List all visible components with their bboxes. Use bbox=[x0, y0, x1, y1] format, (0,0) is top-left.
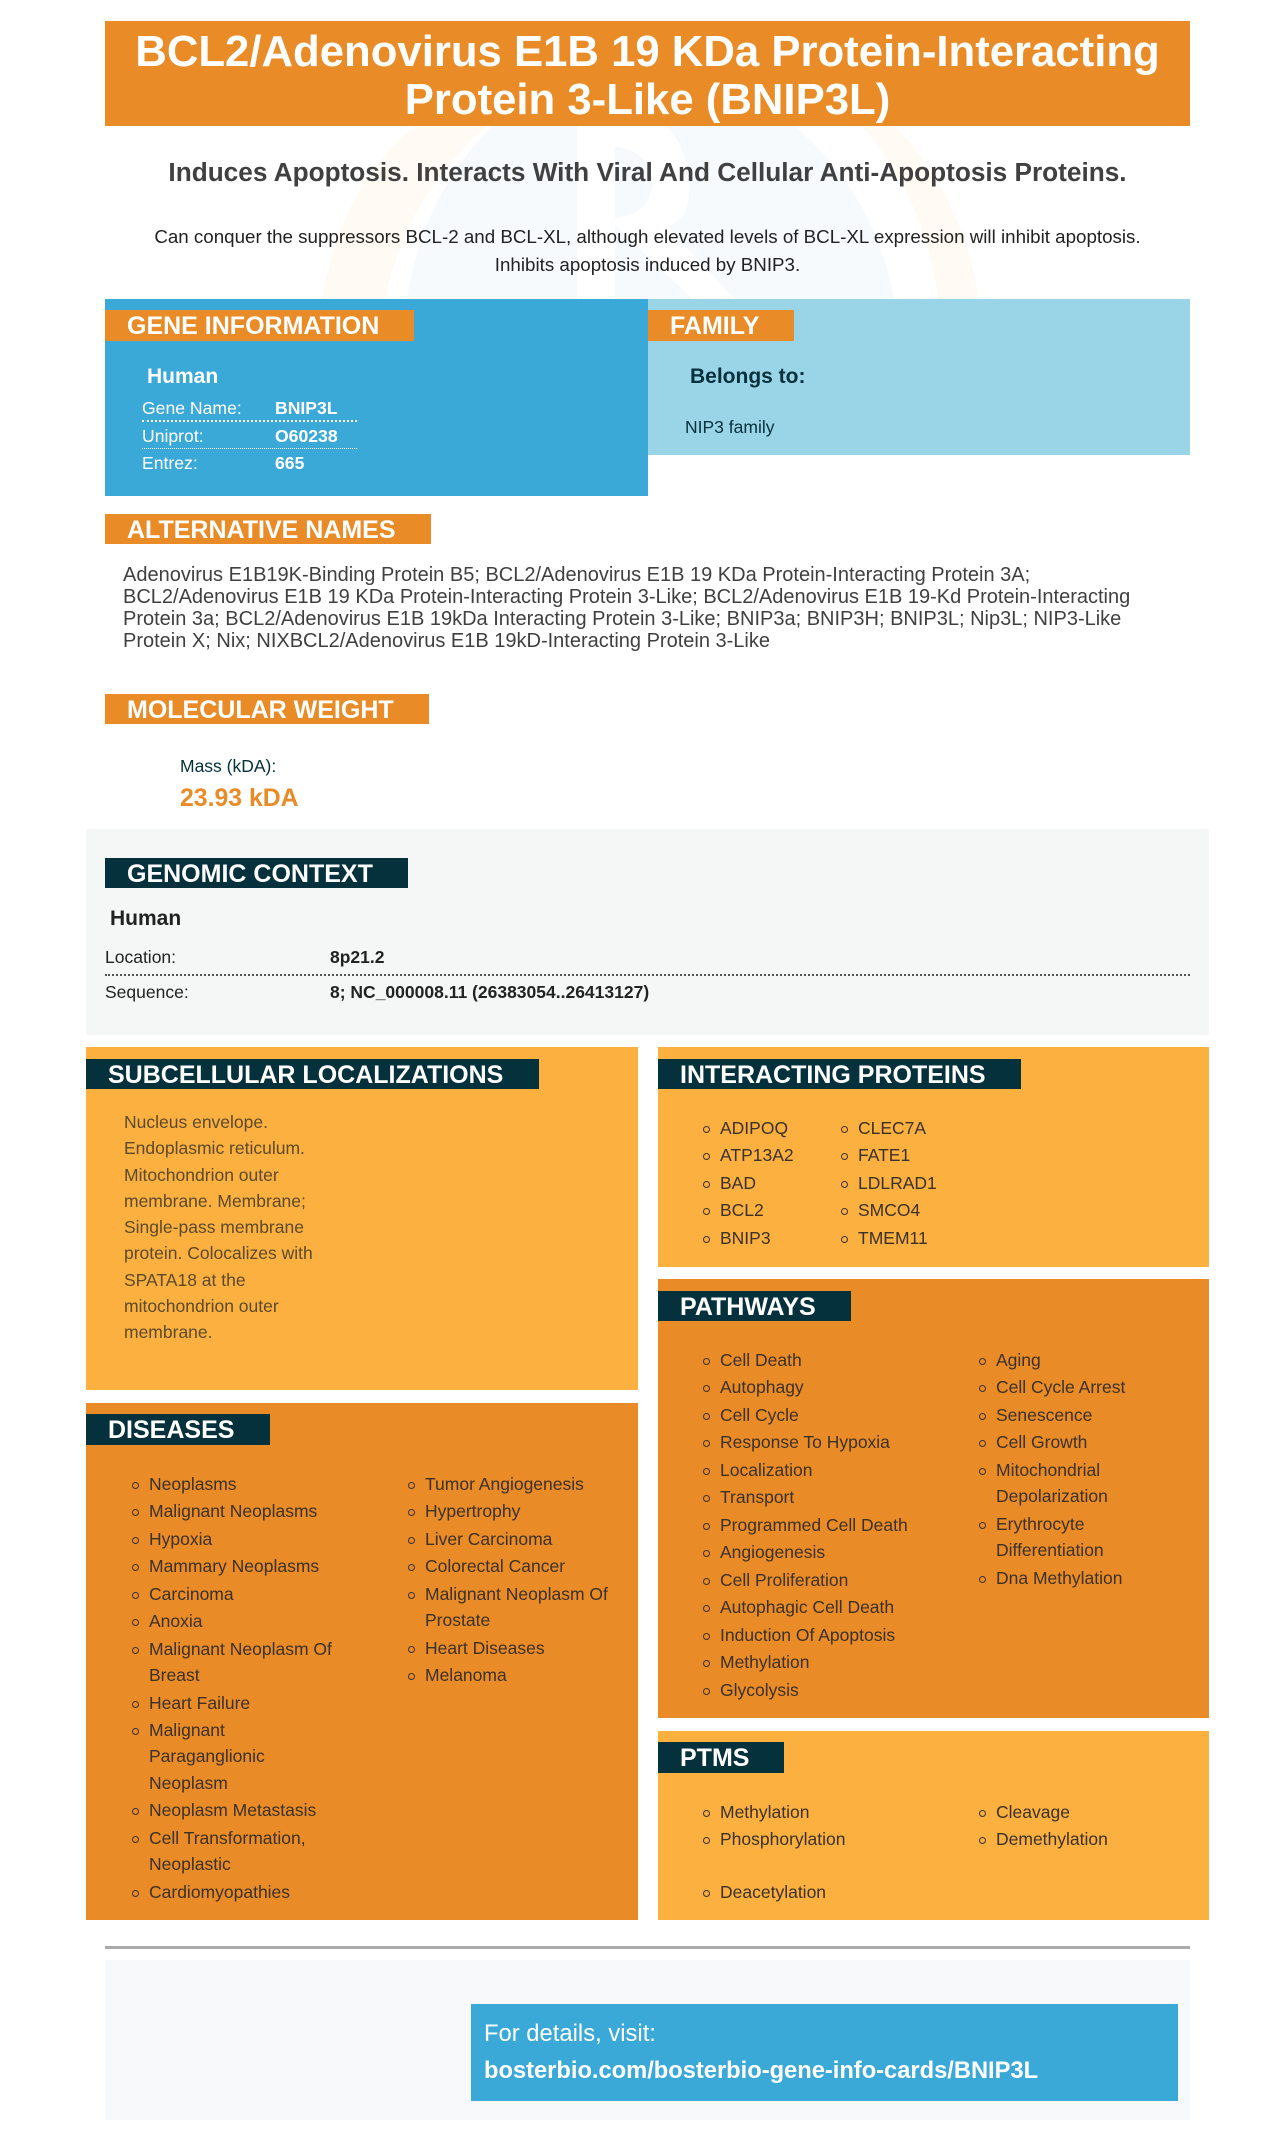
disease list column 1: Paraganglionic bbox=[149, 1746, 265, 1766]
protein list column 1: BCL2 bbox=[720, 1200, 764, 1220]
pathway list column 2: Erythrocyte bbox=[996, 1514, 1084, 1534]
pathway list column 2: Aging bbox=[996, 1350, 1041, 1370]
disease list column 1: Hypoxia bbox=[149, 1529, 212, 1549]
disease list column 1: Carcinoma bbox=[149, 1584, 234, 1604]
row: entrez: Entrez: bbox=[142, 453, 198, 473]
panel: pathways bbox=[658, 1279, 1209, 1718]
PTM list column 2: Cleavage bbox=[996, 1802, 1070, 1822]
row: gene name: BNIP3L bbox=[275, 398, 338, 418]
heading: PTMs bbox=[658, 1742, 784, 1773]
footer divider bbox=[105, 1946, 1190, 1949]
pathway list column 2: Senescence bbox=[996, 1405, 1092, 1425]
localization text: Mitochondrion outer bbox=[124, 1165, 279, 1185]
PTM list column 1 bbox=[703, 1802, 846, 1902]
localization text: membrane. Membrane; bbox=[124, 1191, 306, 1211]
protein list column 2 bbox=[841, 1118, 937, 1248]
disease list column 2: Tumor Angiogenesis bbox=[425, 1474, 584, 1494]
disease list column 1 bbox=[132, 1474, 332, 1902]
species label: Human bbox=[147, 365, 218, 388]
protein list column 2: CLEC7A bbox=[858, 1118, 926, 1138]
heading: gene information: GENE INFORMATION bbox=[127, 312, 379, 340]
panel: gene information bbox=[105, 299, 648, 496]
species label: Human bbox=[110, 907, 181, 930]
pathway list column 2: Depolarization bbox=[996, 1486, 1108, 1506]
localization text: Nucleus envelope. bbox=[124, 1112, 268, 1132]
pathway list column 2 bbox=[979, 1350, 1126, 1588]
pathway list column 2: Mitochondrial bbox=[996, 1460, 1100, 1480]
pathway list column 1: Autophagy bbox=[720, 1377, 804, 1397]
disease list column 1: Anoxia bbox=[149, 1611, 203, 1631]
disease list column 1: Breast bbox=[149, 1665, 200, 1685]
protein list column 1: BNIP3 bbox=[720, 1228, 771, 1248]
disease list column 1: Neoplasm Metastasis bbox=[149, 1800, 316, 1820]
disease list column 1: Neoplasms bbox=[149, 1474, 237, 1494]
pathway list column 1: Methylation bbox=[720, 1652, 810, 1672]
pathway list column 1: Glycolysis bbox=[720, 1680, 799, 1700]
disease list column 2: Colorectal Cancer bbox=[425, 1556, 565, 1576]
panel: diseases bbox=[86, 1403, 638, 1920]
description bbox=[154, 226, 1141, 275]
protein list column 2: TMEM11 bbox=[858, 1228, 928, 1248]
disease list column 1: Cell Transformation, bbox=[149, 1828, 306, 1848]
row: entrez: 665 bbox=[275, 453, 304, 473]
heading: genomic context: GENOMIC CONTEXT bbox=[127, 860, 373, 888]
description: Inhibits apoptosis induced by BNIP3. bbox=[495, 254, 800, 275]
PTM list column 1: Deacetylation bbox=[720, 1882, 826, 1902]
pathway list column 1: Cell Proliferation bbox=[720, 1570, 848, 1590]
protein list column 1: BAD bbox=[720, 1173, 756, 1193]
disease list column 1: Malignant bbox=[149, 1720, 225, 1740]
alternative names text: Protein X; Nix; NIXBCL2/Adenovirus E1B 19kD-Interacting Protein 3-Like bbox=[123, 630, 770, 652]
alternative names text: BCL2/Adenovirus E1B 19 KDa Protein-Interacting Protein 3-Like; BCL2/Adenovirus E1B 19-Kd Protein-Interacting bbox=[123, 586, 1130, 608]
disease list column 1: Malignant Neoplasm Of bbox=[149, 1639, 332, 1659]
pathway list column 1: Cell Death bbox=[720, 1350, 802, 1370]
callout label: For details, visit: bbox=[484, 2020, 656, 2047]
alternative names text: Adenovirus E1B19K-Binding Protein B5; BCL2/Adenovirus E1B 19 KDa Protein-Interacting Protein 3A; bbox=[123, 564, 1030, 586]
heading: pathways bbox=[658, 1291, 851, 1321]
localization text: mitochondrion outer bbox=[124, 1296, 279, 1316]
sequence row bbox=[105, 982, 649, 1002]
disease list column 2 bbox=[408, 1474, 608, 1685]
sequence row: Sequence: bbox=[105, 982, 189, 1002]
disease list column 1: Cardiomyopathies bbox=[149, 1882, 290, 1902]
location row: 8p21.2 bbox=[330, 947, 384, 967]
gene details table bbox=[142, 398, 357, 473]
heading: diseases bbox=[86, 1414, 270, 1445]
row: uniprot bbox=[142, 422, 357, 449]
pathway list column 2: Dna Methylation bbox=[996, 1568, 1122, 1588]
callout url: bosterbio.com/bosterbio-gene-info-cards/BNIP3L bbox=[484, 2058, 1038, 2084]
row: gene name bbox=[142, 395, 357, 422]
protein list column 2: LDLRAD1 bbox=[858, 1173, 937, 1193]
pathway list column 2: Differentiation bbox=[996, 1540, 1104, 1560]
pathway list column 1: Transport bbox=[720, 1487, 794, 1507]
background watermark logo bbox=[322, 126, 978, 299]
alternative names text bbox=[123, 564, 1130, 652]
heading: family: FAMILY bbox=[670, 312, 759, 340]
callout: details link bbox=[471, 2004, 1178, 2101]
family name: NIP3 family bbox=[685, 417, 774, 437]
PTM list column 2: Demethylation bbox=[996, 1829, 1108, 1849]
pathway list column 1: Angiogenesis bbox=[720, 1542, 825, 1562]
PTM list column 1: Methylation bbox=[720, 1802, 810, 1822]
localization text: Single-pass membrane bbox=[124, 1217, 304, 1237]
localization text: protein. Colocalizes with bbox=[124, 1243, 313, 1263]
protein list column 2: SMCO4 bbox=[858, 1200, 920, 1220]
panel: genomic context bbox=[86, 829, 1209, 1035]
location row bbox=[105, 944, 1190, 976]
row: gene name: Gene Name: bbox=[142, 398, 242, 418]
panel: PTMs bbox=[658, 1731, 1209, 1920]
row: entrez bbox=[142, 453, 304, 473]
disease list column 1: Malignant Neoplasms bbox=[149, 1501, 317, 1521]
localization text: SPATA18 at the bbox=[124, 1270, 246, 1290]
location row: Location: bbox=[105, 947, 176, 967]
heading: alternative names: ALTERNATIVE NAMES bbox=[127, 516, 396, 544]
protein list column 1: ATP13A2 bbox=[720, 1145, 794, 1165]
pathway list column 1: Response To Hypoxia bbox=[720, 1432, 890, 1452]
heading: subcellular localizations: SUBCELLULAR LOCALIZATIONS bbox=[108, 1061, 503, 1089]
pathway list column 1: Autophagic Cell Death bbox=[720, 1597, 894, 1617]
subtitle: Induces Apoptosis. Interacts With Viral And Cellular Anti-Apoptosis Proteins. bbox=[168, 157, 1127, 187]
pathway list column 1: Cell Cycle bbox=[720, 1405, 799, 1425]
disease list column 2: Liver Carcinoma bbox=[425, 1529, 552, 1549]
row: uniprot: O60238 bbox=[275, 426, 338, 446]
pathway list column 2: Cell Growth bbox=[996, 1432, 1087, 1452]
heading: PTMs: PTMS bbox=[680, 1744, 749, 1772]
protein list column 2: FATE1 bbox=[858, 1145, 910, 1165]
title banner: Protein 3-Like (BNIP3L) bbox=[405, 75, 890, 124]
pathway list column 1 bbox=[703, 1350, 908, 1700]
title banner: BCL2/Adenovirus E1B 19 KDa Protein-Interacting bbox=[135, 27, 1160, 76]
panel: footer bbox=[105, 1960, 1190, 2120]
disease list column 2: Malignant Neoplasm Of bbox=[425, 1584, 608, 1604]
disease list column 2: Melanoma bbox=[425, 1665, 507, 1685]
title banner bbox=[105, 21, 1190, 126]
row: uniprot: Uniprot: bbox=[142, 426, 204, 446]
belongs to label: Belongs to: bbox=[690, 365, 806, 388]
heading: pathways: PATHWAYS bbox=[680, 1293, 816, 1321]
protein list column 1: ADIPOQ bbox=[720, 1118, 788, 1138]
pathway list column 1: Programmed Cell Death bbox=[720, 1515, 908, 1535]
description: Can conquer the suppressors BCL-2 and BCL-XL, although elevated levels of BCL-XL expression will inhibit apoptosis. bbox=[154, 226, 1141, 247]
heading: interacting proteins: INTERACTING PROTEINS bbox=[680, 1061, 986, 1089]
panel: family bbox=[648, 299, 1190, 455]
localization text: membrane. bbox=[124, 1322, 213, 1342]
mass value: 23.93 kDA bbox=[180, 785, 299, 812]
disease list column 2: Hypertrophy bbox=[425, 1501, 520, 1521]
PTM list column 2 bbox=[979, 1802, 1108, 1849]
sequence row: 8; NC_000008.11 (26383054..26413127) bbox=[330, 982, 649, 1002]
disease list column 1: Neoplasm bbox=[149, 1773, 228, 1793]
disease list column 1: Neoplastic bbox=[149, 1854, 231, 1874]
disease list column 2: Heart Diseases bbox=[425, 1638, 545, 1658]
protein list column 1 bbox=[703, 1118, 794, 1248]
panel: subcellular localizations bbox=[86, 1047, 638, 1390]
disease list column 1: Heart Failure bbox=[149, 1693, 250, 1713]
localization text: Endoplasmic reticulum. bbox=[124, 1138, 305, 1158]
PTM list column 1: Phosphorylation bbox=[720, 1829, 846, 1849]
pathway list column 1: Localization bbox=[720, 1460, 812, 1480]
mass label: Mass (kDA): bbox=[180, 756, 276, 776]
pathway list column 2: Cell Cycle Arrest bbox=[996, 1377, 1125, 1397]
alternative names text: Protein 3a; BCL2/Adenovirus E1B 19kDa Interacting Protein 3-Like; BNIP3a; BNIP3H; BNIP3L; Nip3L; NIP3-Like bbox=[123, 608, 1121, 630]
heading: molecular weight: MOLECULAR WEIGHT bbox=[127, 696, 394, 724]
localization text bbox=[124, 1112, 313, 1342]
heading: diseases: DISEASES bbox=[108, 1416, 234, 1444]
pathway list column 1: Induction Of Apoptosis bbox=[720, 1625, 895, 1645]
panel: interacting proteins bbox=[658, 1047, 1209, 1267]
disease list column 1: Mammary Neoplasms bbox=[149, 1556, 319, 1576]
disease list column 2: Prostate bbox=[425, 1610, 490, 1630]
heading: family bbox=[648, 310, 794, 341]
